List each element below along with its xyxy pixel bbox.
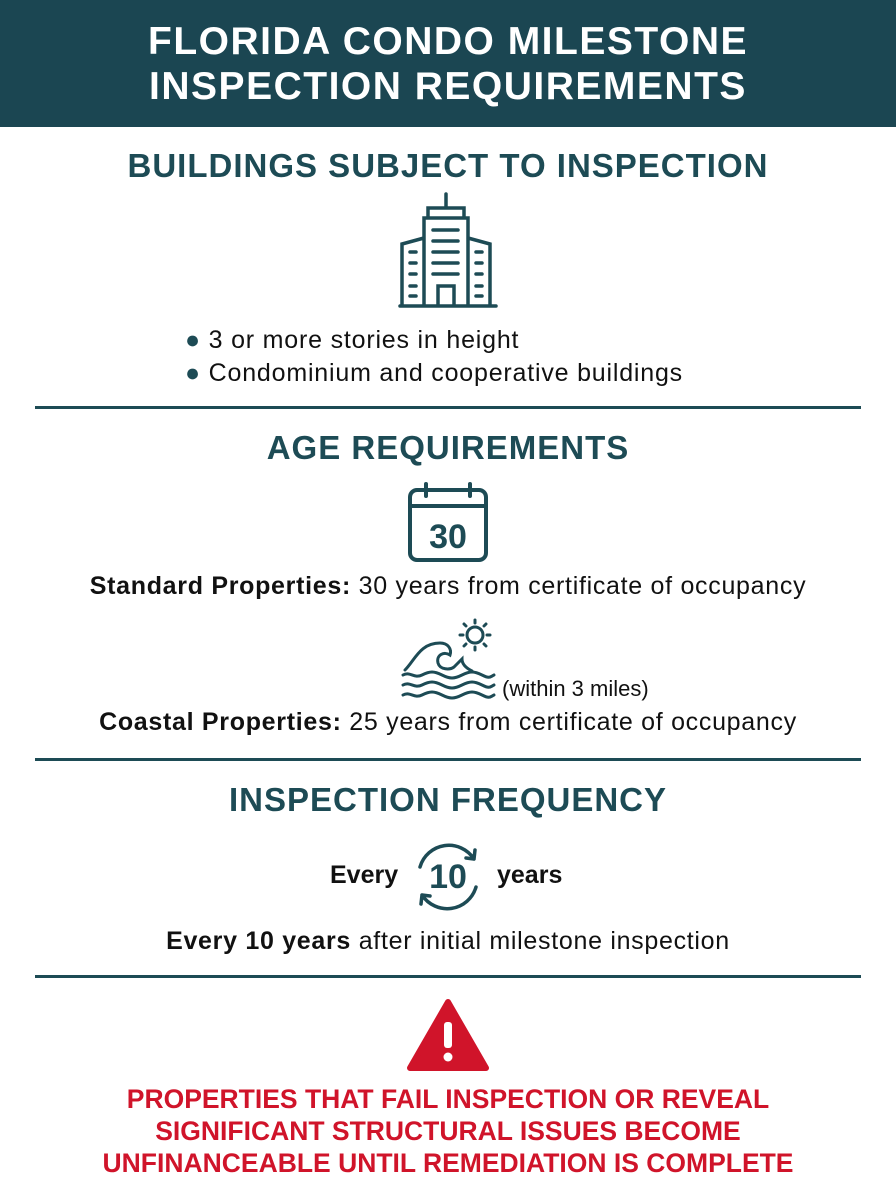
icon: calendar 30 [408, 482, 488, 562]
within 3 miles note: (within 3 miles) [502, 676, 649, 701]
title: INSPECTION REQUIREMENTS [149, 65, 747, 108]
warning text: SIGNIFICANT STRUCTURAL ISSUES BECOME [155, 1116, 741, 1146]
icon: calendar 30: 30 [429, 518, 467, 556]
frequency text: Every 10 years after initial milestone inspection [166, 927, 730, 955]
title [148, 20, 748, 108]
warning text: UNFINANCEABLE UNTIL REMEDIATION IS COMPLETE [103, 1148, 793, 1178]
warning text [103, 1084, 793, 1178]
title: FLORIDA CONDO MILESTONE [148, 20, 748, 63]
standard properties text: Standard Properties: 30 years from certificate of occupancy [90, 572, 806, 600]
header banner [0, 0, 896, 127]
icon: warning [407, 999, 489, 1071]
icon: cycle every 10 years: 10 [429, 858, 467, 896]
bullet list [185, 326, 683, 387]
coastal properties text: Coastal Properties: 25 years from certificate of occupancy [99, 708, 797, 736]
icon: building [398, 192, 498, 308]
bullet list: ● Condominium and cooperative buildings [185, 359, 683, 387]
icon: cycle every 10 years: Every [330, 861, 398, 889]
icon: cycle every 10 years: years [497, 861, 562, 889]
heading: buildings subject: BUILDINGS SUBJECT TO INSPECTION [128, 147, 768, 184]
bullet list: ● 3 or more stories in height [185, 326, 519, 354]
heading: inspection frequency: INSPECTION FREQUENCY [229, 781, 667, 818]
heading: age requirements: AGE REQUIREMENTS [267, 429, 629, 466]
icon: cycle every 10 years [330, 844, 562, 910]
warning text: PROPERTIES THAT FAIL INSPECTION OR REVEAL [127, 1084, 769, 1114]
icon: waves and sun [401, 618, 496, 700]
